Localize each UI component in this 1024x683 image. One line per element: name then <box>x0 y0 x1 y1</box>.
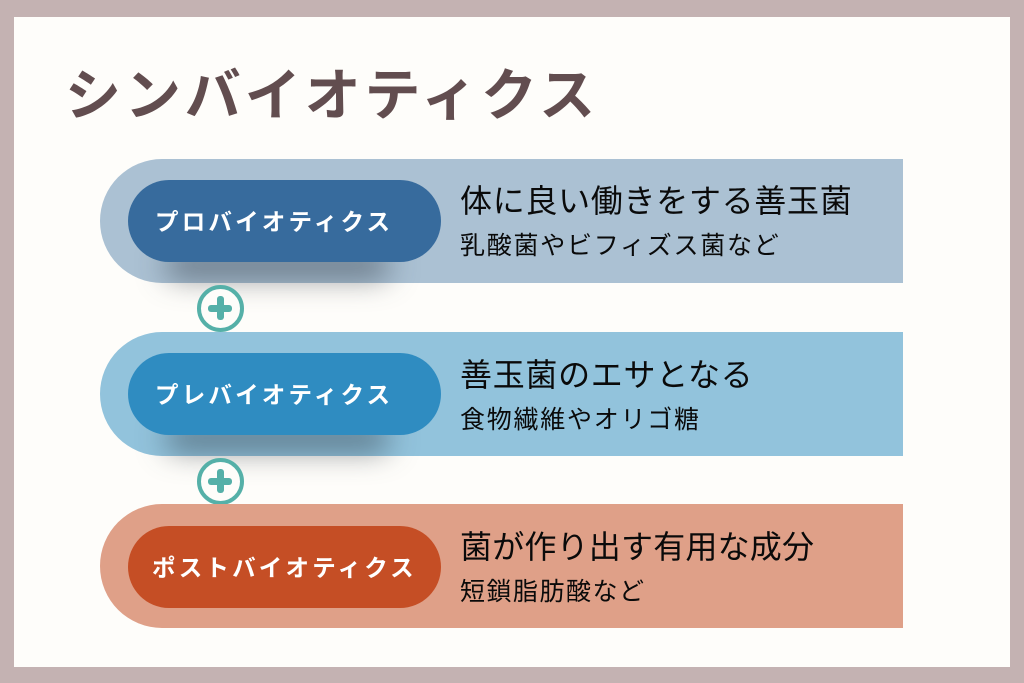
pill: prebiotics label: プレバイオティクス <box>155 382 393 408</box>
pill: prebiotics label <box>128 353 441 435</box>
pill shadow: prebiotics <box>165 425 390 451</box>
panel: probiotics band <box>100 159 903 283</box>
pill: probiotics label: プロバイオティクス <box>155 209 393 235</box>
icon: plus 2 <box>197 458 244 505</box>
pill: postbiotics label: ポストバイオティクス <box>152 555 417 581</box>
pill shadow: probiotics <box>165 252 390 278</box>
title: シンバイオティクス <box>65 64 599 127</box>
heading: prebiotics description: 善玉菌のエサとなる <box>460 357 753 393</box>
text: prebiotics examples: 食物繊維やオリゴ糖 <box>460 406 701 434</box>
pill: probiotics label <box>128 180 441 262</box>
panel: postbiotics band <box>100 504 903 628</box>
text: probiotics examples: 乳酸菌やビフィズス菌など <box>460 232 781 260</box>
pill: postbiotics label <box>128 526 441 608</box>
panel: prebiotics band <box>100 332 903 456</box>
text: postbiotics examples: 短鎖脂肪酸など <box>460 578 646 606</box>
heading: probiotics description: 体に良い働きをする善玉菌 <box>460 183 852 219</box>
icon: plus 1 <box>197 285 244 332</box>
heading: postbiotics description: 菌が作り出す有用な成分 <box>460 529 814 565</box>
